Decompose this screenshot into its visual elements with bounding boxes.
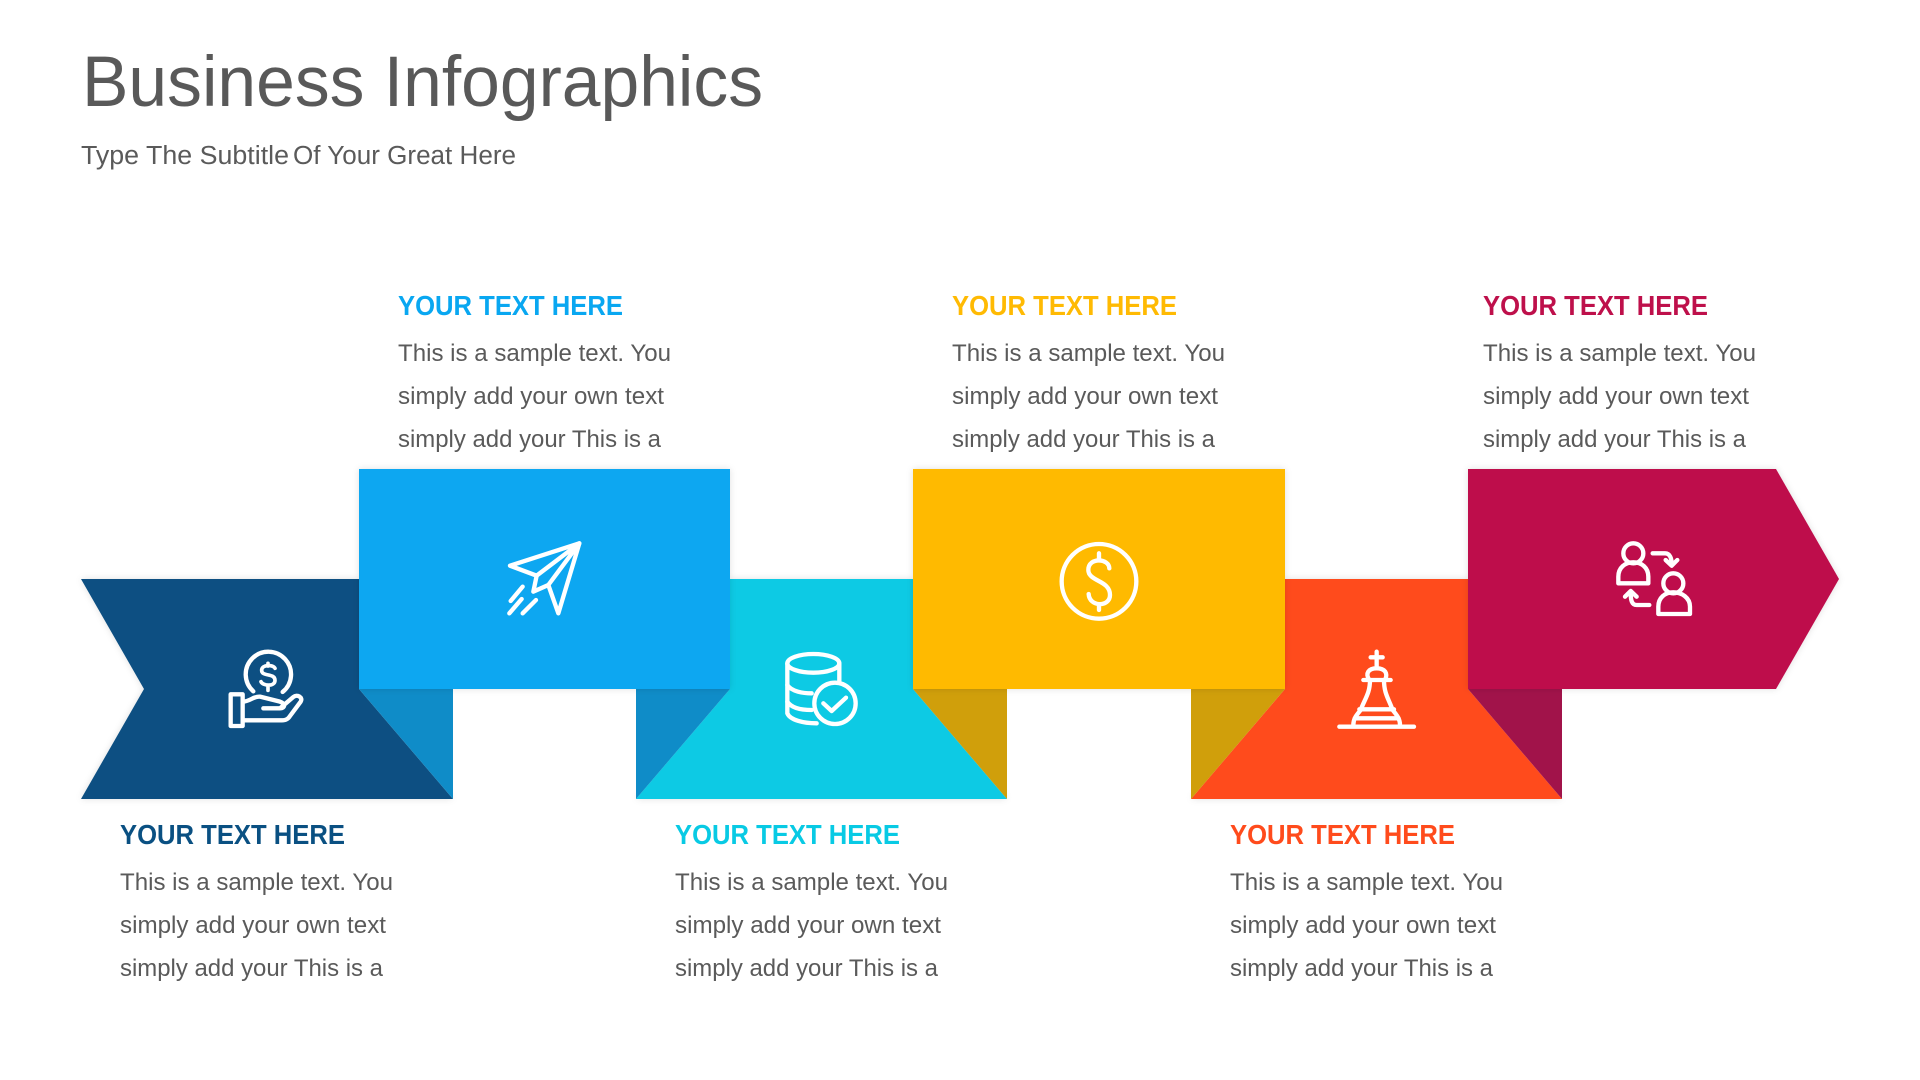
text block: step 2: This is a sample text. You (398, 340, 671, 367)
text block: step 2: YOUR TEXT HERE (398, 290, 623, 321)
icon: chess king (1339, 652, 1414, 727)
text block: step 4: YOUR TEXT HERE (952, 290, 1177, 321)
fold: crimson right (1468, 689, 1562, 799)
icon: paper plane (509, 543, 579, 613)
step 6 arrow panel: crimson (1468, 469, 1839, 689)
text block: step 1: simply add your This is a (120, 955, 384, 982)
subtitle: Type The Subtitle (81, 142, 289, 170)
subtitle: Of Your Great Here (293, 142, 516, 170)
text block: step 3: simply add your This is a (675, 955, 939, 982)
text block: step 5: simply add your own text (1230, 912, 1496, 939)
text block: step 2: simply add your own text (398, 383, 664, 410)
step 1 ribbon: navy (81, 579, 453, 799)
title: Business Infographics (82, 43, 763, 122)
text block: step 2 (398, 290, 671, 453)
text block: step 1: This is a sample text. You (120, 869, 393, 896)
text block: step 3: This is a sample text. You (675, 869, 948, 896)
icon: people exchange (1618, 543, 1690, 614)
text block: step 3 (675, 819, 948, 982)
text block: step 5: YOUR TEXT HERE (1230, 819, 1455, 850)
step 2 panel: blue (359, 469, 730, 689)
icon: database check (787, 654, 856, 724)
step 4 panel: amber (913, 469, 1285, 689)
text block: step 2: simply add your This is a (398, 426, 662, 453)
icon: hand holding coin (231, 652, 301, 726)
text block: step 5: simply add your This is a (1230, 955, 1494, 982)
step 3 ribbon: cyan (636, 579, 1007, 799)
text block: step 6: This is a sample text. You (1483, 340, 1756, 367)
text block: step 6: simply add your This is a (1483, 426, 1747, 453)
fold: amber right (913, 689, 1007, 799)
subtitle (81, 142, 516, 170)
text block: step 4 (952, 290, 1225, 453)
text block: step 4: simply add your own text (952, 383, 1218, 410)
icon: dollar circle (1062, 544, 1136, 619)
text block: step 6: YOUR TEXT HERE (1483, 290, 1708, 321)
fold: blue right (359, 689, 453, 799)
text block: step 5: This is a sample text. You (1230, 869, 1503, 896)
fold: amber left (1191, 689, 1285, 799)
text block: step 6: simply add your own text (1483, 383, 1749, 410)
text block: step 1: simply add your own text (120, 912, 386, 939)
step 5 ribbon: orange (1191, 579, 1562, 799)
text block: step 4: simply add your This is a (952, 426, 1216, 453)
text block: step 5 (1230, 819, 1503, 982)
text block: step 6 (1483, 290, 1756, 453)
text block: step 3: YOUR TEXT HERE (675, 819, 900, 850)
text block: step 4: This is a sample text. You (952, 340, 1225, 367)
text block: step 1 (120, 819, 393, 982)
text block: step 3: simply add your own text (675, 912, 941, 939)
text block: step 1: YOUR TEXT HERE (120, 819, 345, 850)
fold: blue left (636, 689, 730, 799)
